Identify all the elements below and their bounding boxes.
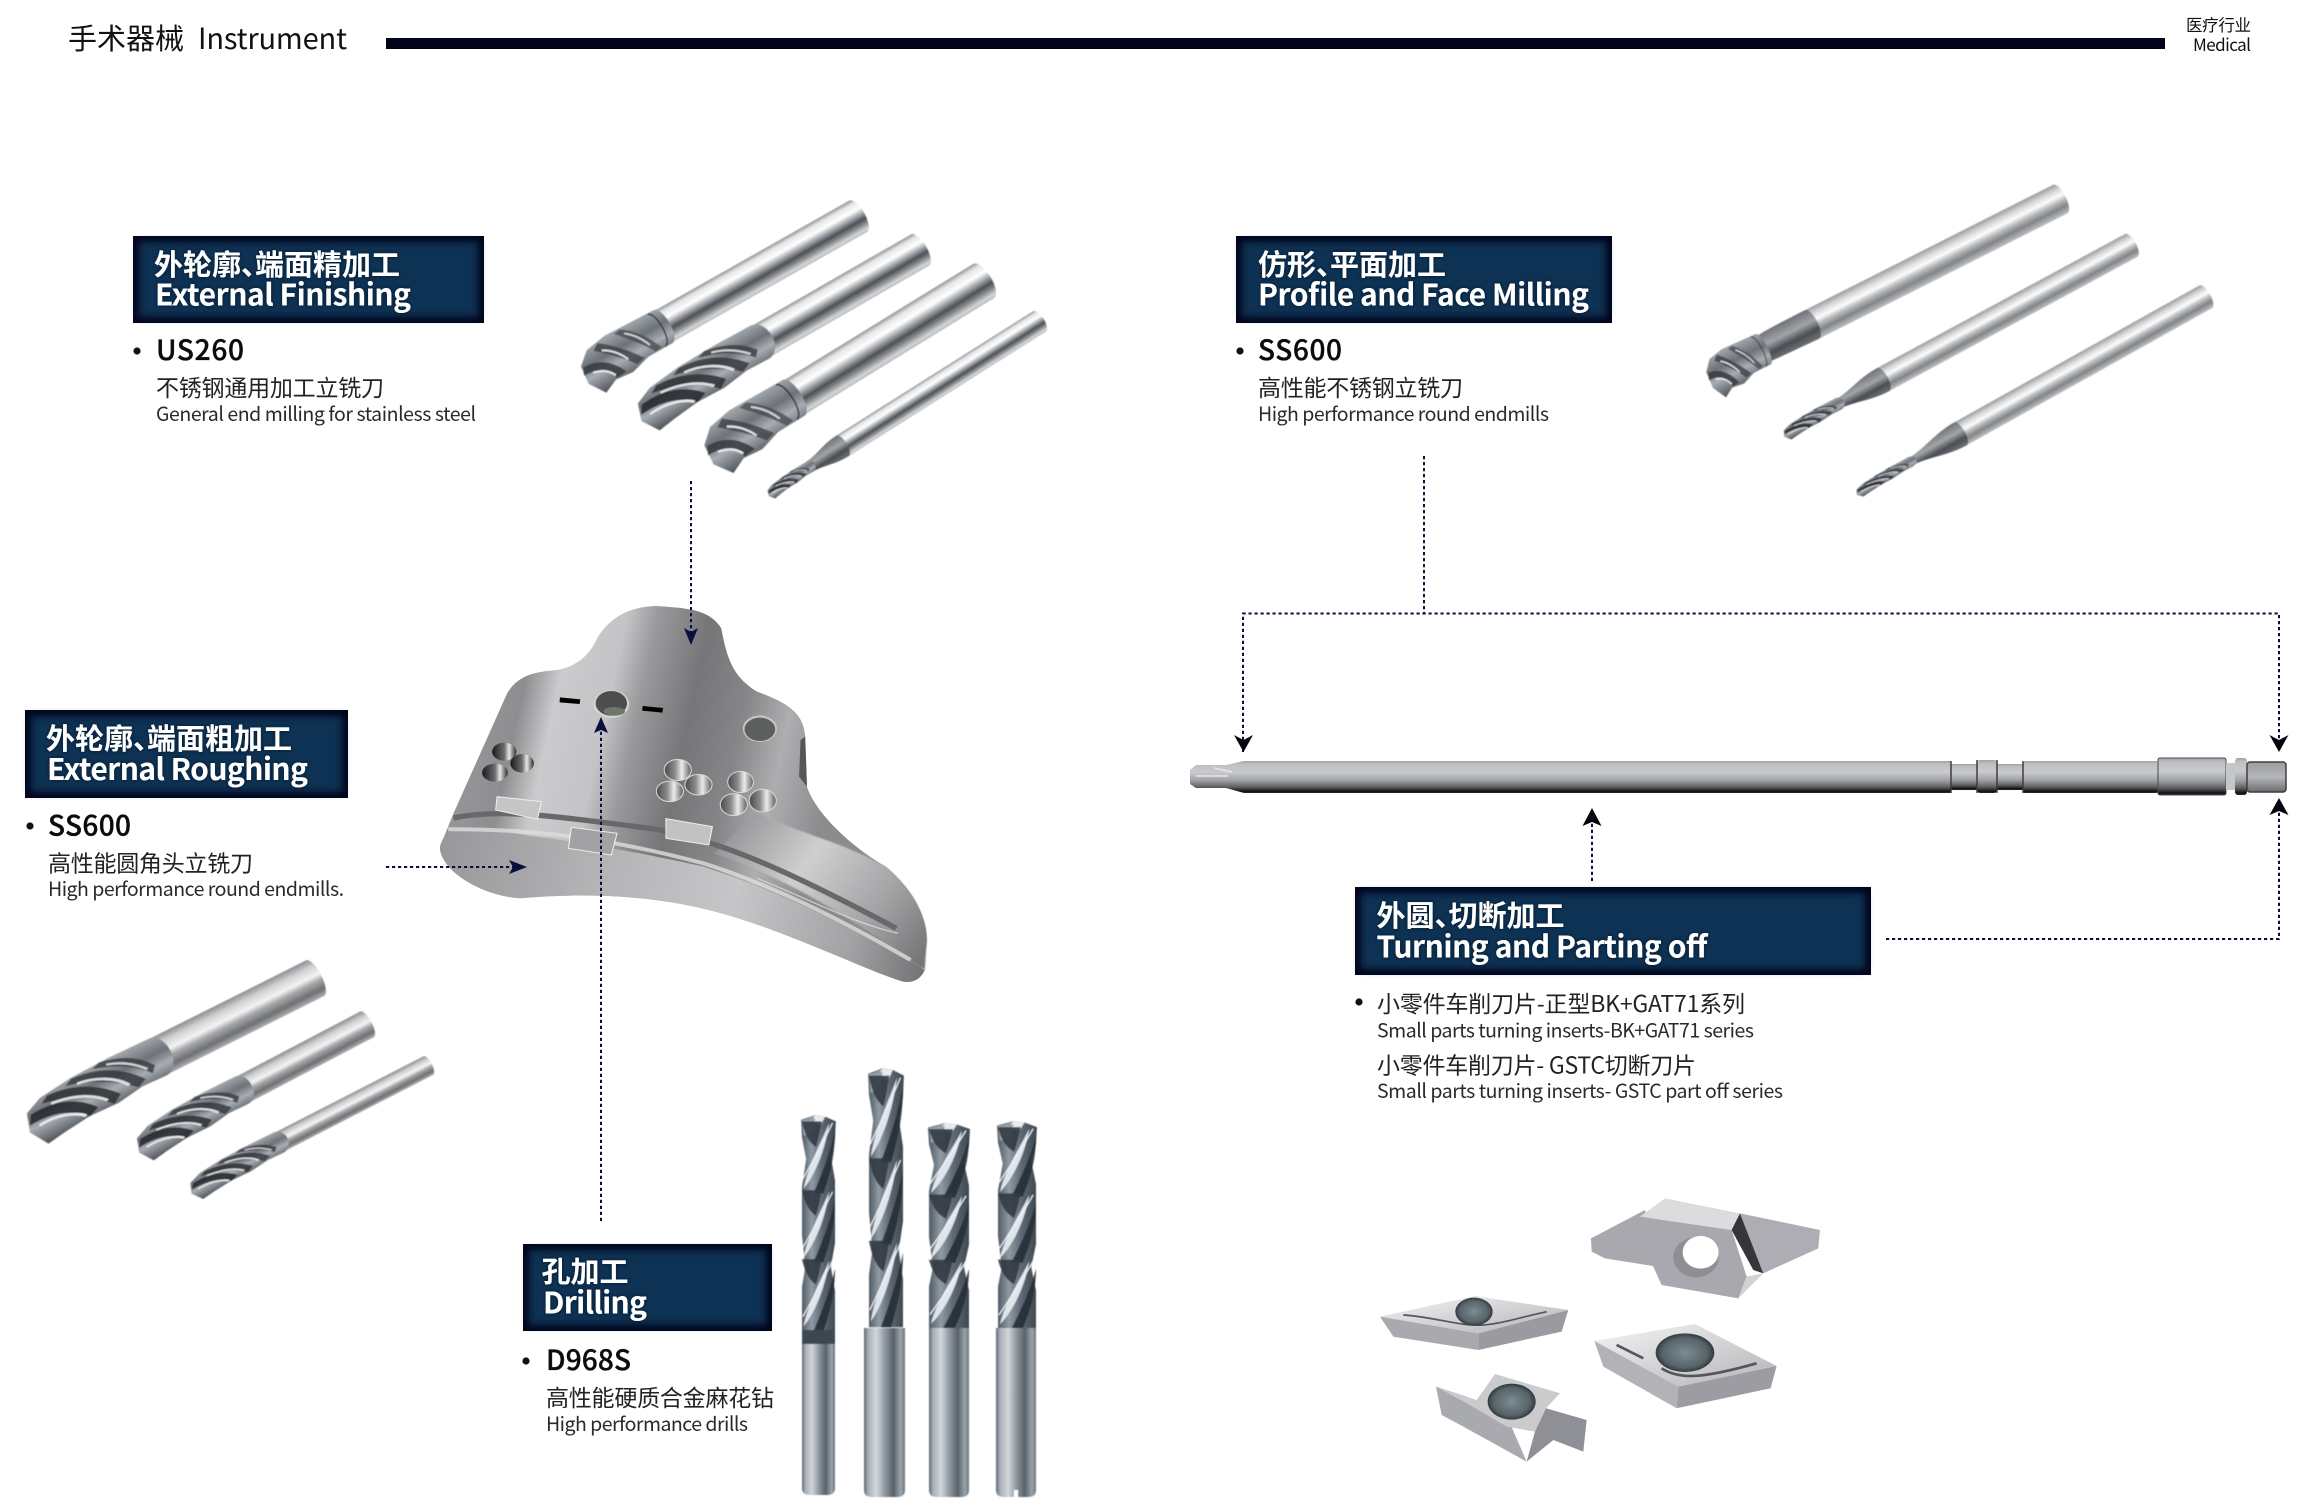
arrow: external roughing to part [386, 860, 527, 874]
insert: parting tool [1591, 1198, 1820, 1298]
implant: rail groove [454, 814, 896, 928]
insert: diamond large [1594, 1324, 1777, 1408]
heading: drilling: 孔加工 [542, 1249, 629, 1291]
heading: turning and parting off [1355, 887, 1871, 975]
heading: external finishing: 外轮廓、端面精加工 [154, 242, 400, 284]
product text: D968S: High performance drills [546, 1408, 748, 1437]
panel: external roughing [25, 710, 348, 902]
heading: profile and face milling: 仿形、平面加工 [1258, 242, 1446, 284]
panel: turning and parting off [1355, 887, 1871, 1104]
product text: turning inserts: Small parts turning inserts- GSTC part off series [1377, 1075, 1783, 1104]
product text: SS600: SS600 [48, 804, 131, 844]
bullet: SS600 [26, 822, 34, 830]
bullet: US260 [133, 347, 141, 355]
arrow: turning to shaft end [1886, 798, 2288, 939]
implant: right hole [743, 715, 777, 742]
heading: turning and parting off: Turning and Parting off [1376, 922, 1709, 966]
product text: SS600 [1258, 329, 1549, 427]
product text: US260: US260 [156, 329, 244, 369]
image: finishing end mills [572, 195, 1050, 504]
panel: drilling [522, 1244, 774, 1437]
image: roughing end mills [16, 956, 439, 1203]
product text: US260: 不锈钢通用加工立铣刀 [156, 369, 384, 403]
header: industry tag: 医疗行业 [2186, 12, 2251, 36]
heading: external roughing: External Roughing [47, 745, 308, 789]
product text: D968S: 高性能硬质合金麻花钻 [546, 1379, 774, 1413]
heading: drilling [523, 1244, 772, 1331]
arrow: profile milling to shaft ends [1234, 456, 2288, 752]
panel: profile and face milling [1236, 236, 1612, 427]
heading: profile and face milling: Profile and Face Milling [1258, 270, 1589, 314]
product text: turning inserts: 小零件车削刀片- GSTC切断刀片 [1377, 1046, 1696, 1080]
implant: side slots [560, 697, 663, 713]
product text: SS600: 高性能圆角头立铣刀 [48, 844, 253, 878]
product text: SS600: High performance round endmills. [48, 873, 344, 902]
image: drills [801, 1068, 1037, 1497]
arrow: turning to shaft centre [1582, 808, 1602, 881]
bullet: SS600 [1236, 347, 1244, 355]
product text: SS600 [48, 804, 344, 902]
heading: drilling: Drilling [543, 1278, 647, 1322]
insert: diamond small [1380, 1296, 1568, 1350]
arrow: drilling to part [594, 717, 608, 1221]
bullet: turning inserts [1355, 998, 1363, 1006]
product text: turning inserts [1377, 985, 1783, 1104]
implant: lower front face [440, 828, 925, 982]
product text: SS600: SS600 [1258, 329, 1342, 369]
product text: SS600: 高性能不锈钢立铣刀 [1258, 369, 1463, 403]
image: medical implant part [440, 606, 927, 982]
header rule [386, 38, 2165, 49]
image: turning inserts [1380, 1198, 1820, 1462]
heading: profile and face milling [1236, 236, 1612, 323]
insert: grooving [1436, 1374, 1587, 1462]
heading: external roughing [25, 710, 348, 798]
implant: screw hole clusters [482, 743, 776, 816]
product text: turning inserts: 小零件车削刀片-正型BK+GAT71系列 [1377, 985, 1745, 1019]
arrow: external finishing to part [684, 481, 698, 645]
implant: centre hole [593, 690, 629, 718]
panel: external finishing [133, 236, 484, 427]
header: industry tag: Medical [2193, 31, 2251, 56]
implant: right shoulder [714, 813, 927, 970]
product text: US260: General end milling for stainless steel [156, 398, 476, 427]
header: section title [68, 16, 347, 58]
implant: side wall shadow [799, 737, 807, 787]
product text: D968S: D968S [546, 1339, 631, 1379]
header: industry tag [2186, 12, 2251, 56]
product text: D968S [546, 1339, 774, 1437]
heading: external finishing [133, 236, 484, 323]
header: section title: 手术器械 [68, 16, 184, 58]
heading: external roughing: 外轮廓、端面粗加工 [46, 716, 292, 758]
product text: turning inserts: Small parts turning inserts-BK+GAT71 series [1377, 1014, 1754, 1044]
product text: SS600: High performance round endmills [1258, 398, 1549, 427]
header: section title: Instrument [198, 16, 347, 58]
heading: turning and parting off: 外圆、切断加工 [1376, 893, 1565, 935]
implant: tabs [496, 797, 712, 855]
image: profile end mills [1699, 180, 2216, 504]
heading: external finishing: External Finishing [155, 270, 411, 314]
bullet: D968S [522, 1357, 530, 1365]
image: stepped shaft [1190, 758, 2286, 795]
product text: US260 [156, 329, 476, 427]
